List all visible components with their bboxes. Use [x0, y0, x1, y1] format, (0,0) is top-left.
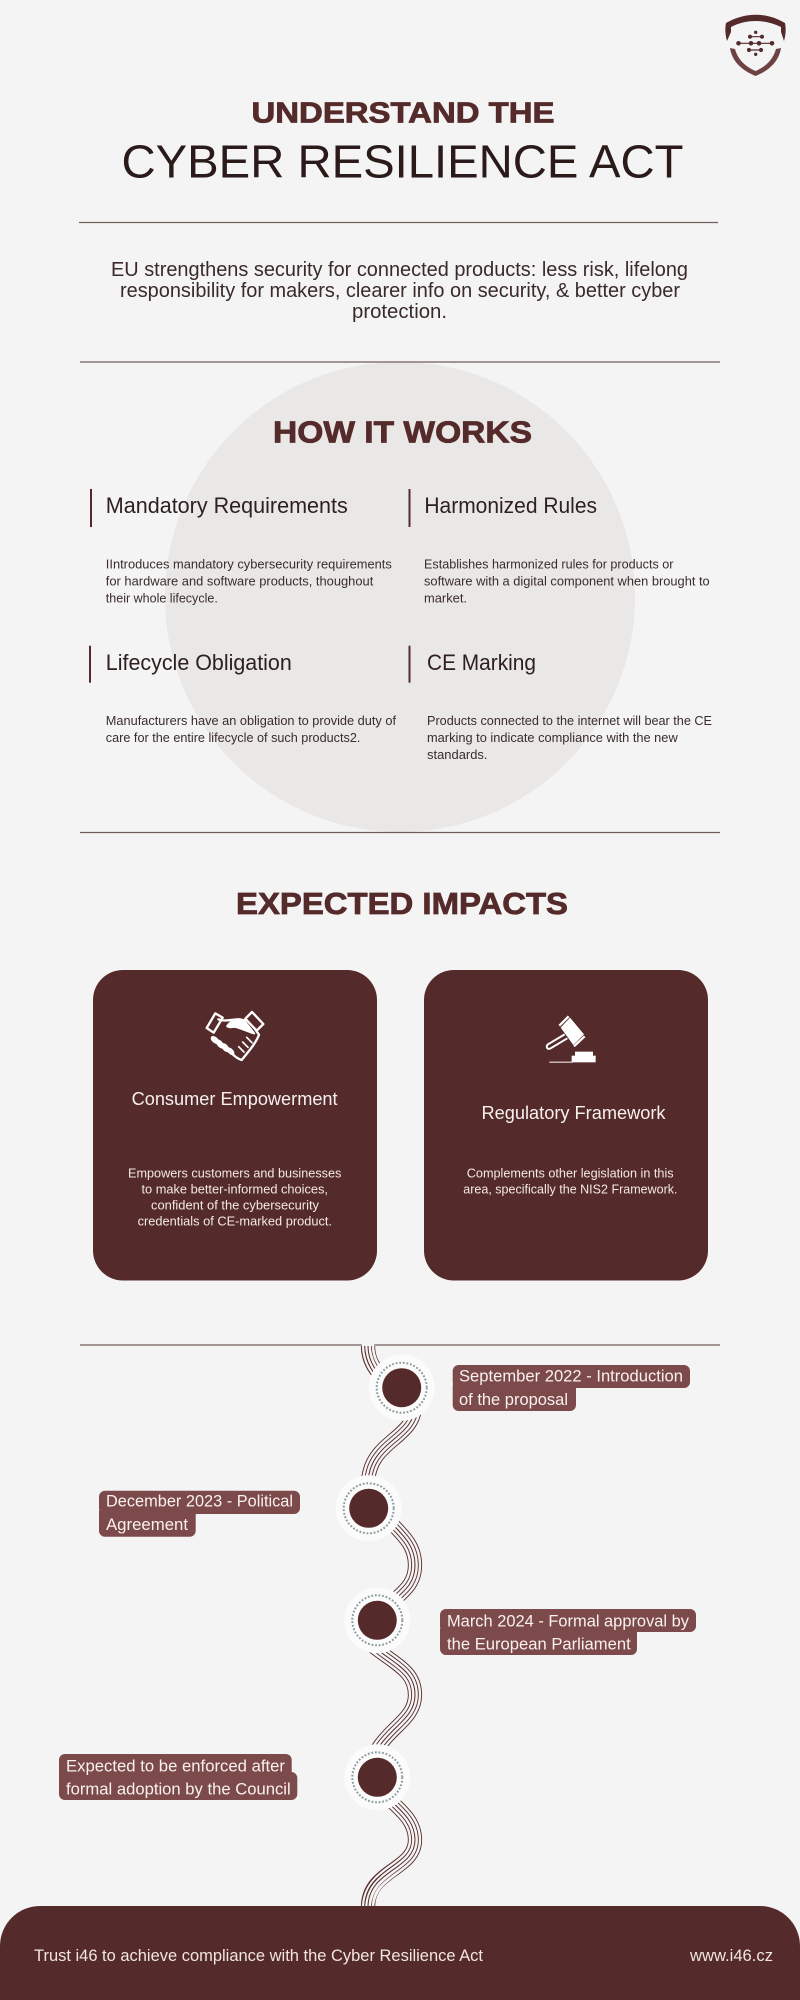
- panel: regulatory framework: Complements other legislation in this: [467, 1166, 674, 1180]
- intro text: protection.: [352, 301, 447, 323]
- timeline label: December 2023: Agreement: [106, 1516, 188, 1534]
- item: lifecycle obligation: [89, 646, 396, 745]
- intro text: responsibility for makers, clearer info on security, & better cyber: [120, 280, 680, 302]
- footer url: www.i46.cz: [689, 1946, 773, 1965]
- timeline node 2: [336, 1475, 402, 1541]
- timeline node 4: [344, 1744, 410, 1810]
- title: [122, 98, 684, 188]
- timeline label: December 2023: [99, 1491, 300, 1537]
- timeline label: March 2024: the European Parliament: [447, 1636, 631, 1654]
- timeline label: September 2022: September 2022 - Introduction: [459, 1368, 683, 1386]
- timeline wave: [365, 1344, 415, 1909]
- panel: regulatory framework: area, specifically the NIS2 Framework.: [463, 1182, 678, 1196]
- item: mandatory requirements: for hardware and software products, thoughout: [106, 574, 374, 588]
- background circle: [165, 362, 635, 832]
- timeline label: December 2023: December 2023 - Political: [106, 1493, 293, 1511]
- item: harmonized rules: Harmonized Rules: [424, 493, 597, 518]
- panel: regulatory framework: [424, 970, 708, 1280]
- item: CE marking: [408, 646, 712, 762]
- item: CE marking: CE Marking: [427, 650, 536, 675]
- panel: consumer empowerment: Empowers customers and businesses: [128, 1166, 341, 1180]
- item: lifecycle obligation: Lifecycle Obligation: [106, 650, 292, 675]
- timeline label: expected enforcement: formal adoption by the Council: [66, 1780, 291, 1798]
- item: lifecycle obligation: Manufacturers have an obligation to provide duty of: [106, 713, 396, 728]
- timeline label: March 2024: [440, 1609, 696, 1655]
- heading: how it works: HOW IT WORKS: [273, 414, 532, 450]
- timeline label: September 2022: [453, 1365, 690, 1411]
- icon: handshake: [207, 1012, 263, 1060]
- panel: how it works items: [89, 489, 712, 762]
- item: CE marking: marking to indicate compliance with the new: [427, 730, 678, 745]
- timeline label: September 2022: of the proposal: [459, 1391, 568, 1409]
- timeline node 1: [369, 1355, 435, 1421]
- item: harmonized rules: market.: [424, 590, 467, 606]
- item: CE marking: Products connected to the internet will bear the CE: [427, 713, 712, 728]
- panel: consumer empowerment: [93, 970, 377, 1280]
- item: lifecycle obligation: care for the entire lifecycle of such products2.: [106, 730, 360, 745]
- item: mandatory requirements: Mandatory Requirements: [106, 493, 348, 518]
- item: harmonized rules: software with a digital component when brought to: [424, 574, 710, 588]
- item: CE marking: standards.: [427, 747, 488, 762]
- title: CYBER RESILIENCE ACT: [122, 136, 684, 188]
- item: mandatory requirements: their whole lifecycle.: [106, 590, 218, 606]
- intro text: [111, 259, 688, 323]
- item: mandatory requirements: IIntroduces mandatory cybersecurity requirements: [106, 556, 392, 572]
- icon: gavel: [547, 1016, 596, 1063]
- panel: consumer empowerment: Consumer Empowerment: [132, 1089, 338, 1109]
- panel: consumer empowerment: confident of the cybersecurity: [151, 1198, 320, 1212]
- timeline label: March 2024: March 2024 - Formal approval by: [447, 1613, 690, 1631]
- item: harmonized rules: [408, 489, 710, 606]
- item: harmonized rules: Establishes harmonized rules for products or: [424, 556, 674, 572]
- title: UNDERSTAND THE: [252, 98, 554, 130]
- panel: consumer empowerment: to make better-informed choices,: [142, 1182, 328, 1196]
- icon: shield logo: [725, 15, 786, 76]
- footer: [0, 1906, 800, 2000]
- heading: expected impacts: EXPECTED IMPACTS: [236, 886, 568, 921]
- intro text: EU strengthens security for connected products: less risk, lifelong: [111, 259, 688, 281]
- panel: consumer empowerment: credentials of CE-marked product.: [138, 1214, 332, 1228]
- timeline label: expected enforcement: [59, 1754, 297, 1800]
- item: mandatory requirements: [90, 489, 392, 606]
- panel: regulatory framework: Regulatory Framework: [482, 1103, 667, 1123]
- footer tagline: Trust i46 to achieve compliance with the Cyber Resilience Act: [34, 1946, 483, 1965]
- timeline label: expected enforcement: Expected to be enforced after: [66, 1758, 286, 1776]
- timeline node 3: [344, 1587, 410, 1653]
